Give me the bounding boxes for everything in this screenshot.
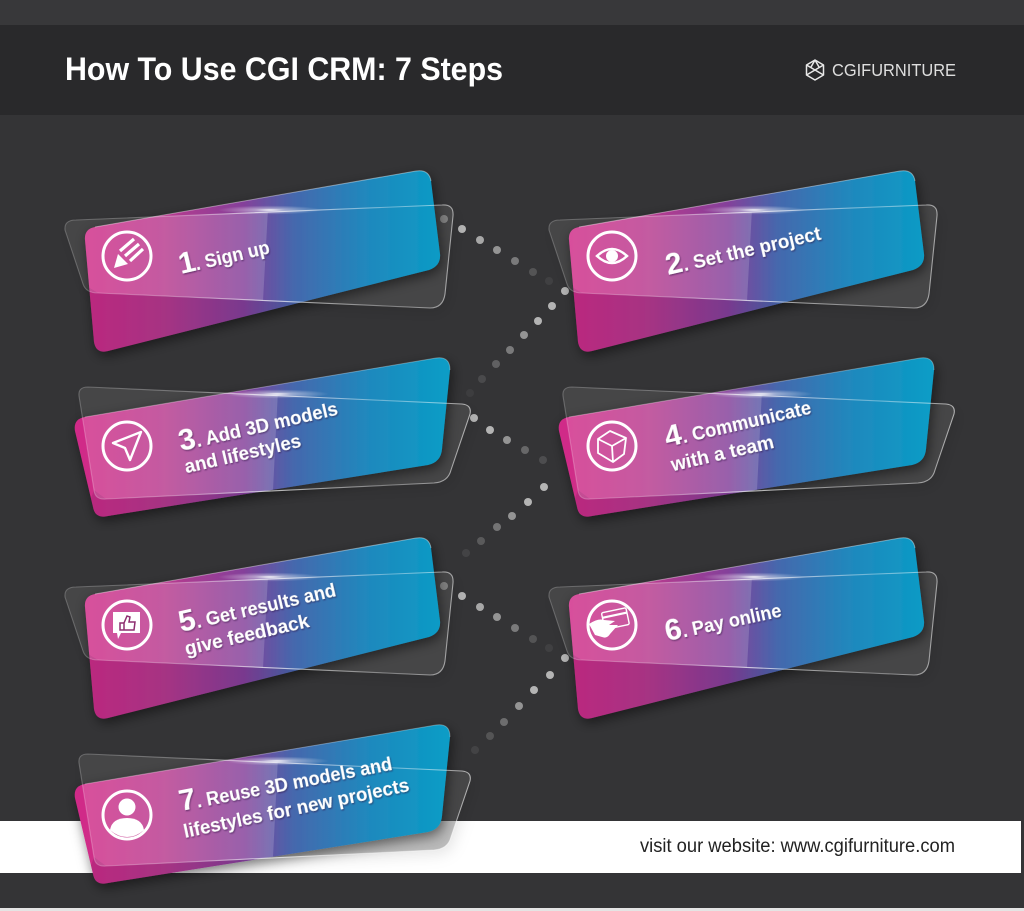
panel: step 1 [60,171,453,360]
step 7 label: 7 [176,782,199,818]
footer website text: visit our website: www.cgifurniture.com [640,835,955,857]
step 5 label [175,571,343,660]
step 5 label: . Get results and [194,580,338,633]
step 3 label [175,389,345,478]
panel: step 4 [544,358,954,530]
panel: step 7 [60,725,470,897]
icon: pencil [103,232,151,280]
step 4 label: . Communicate [680,398,813,448]
footer band [0,821,1021,873]
step 4 label [660,388,819,476]
step 6 label: 6 [662,612,685,648]
step 4 label: 4 [661,418,685,454]
icon: cube [588,422,636,470]
step 6 label [662,591,784,648]
bottom edge strip [0,908,1024,911]
step 5 label: 5 [175,603,199,639]
icon: thumbs up speech bubble [103,601,151,649]
step 2 label [662,214,824,282]
panel: step 3 [60,358,470,530]
step 7 label, second line: lifestyles for new projects [182,775,411,843]
step 2 label: 2 [662,246,686,282]
top strip [0,0,1024,25]
step 6 label: . Pay online [680,601,783,642]
title: How To Use CGI CRM: 7 Steps [65,51,503,87]
icon: person [103,791,151,839]
panel: step 6 [544,538,937,727]
step 4 label: with a team [668,432,776,476]
panel: step 2 [544,171,937,360]
icon: hand holding credit card [588,601,636,649]
step 1 label: 1 [175,245,199,281]
step 7 label: . Reuse 3D models and [195,754,394,813]
step 3 label: and lifestyles [183,431,303,478]
dotted connectors [440,215,569,754]
icon: navigation arrow [103,422,151,470]
icon: eye [588,232,636,280]
header band [0,25,1024,115]
step 3 label: 3 [175,422,199,458]
step 1 label: . Sign up [193,238,272,275]
step 5 label: give feedback [183,611,312,660]
panel: step 5 [60,538,453,727]
step 3 label: . Add 3D models [194,399,340,452]
step 1 label [175,228,272,281]
logo: CGIFURNITURE: CGIFURNITURE [832,60,956,80]
step 2 label: . Set the project [681,224,824,276]
